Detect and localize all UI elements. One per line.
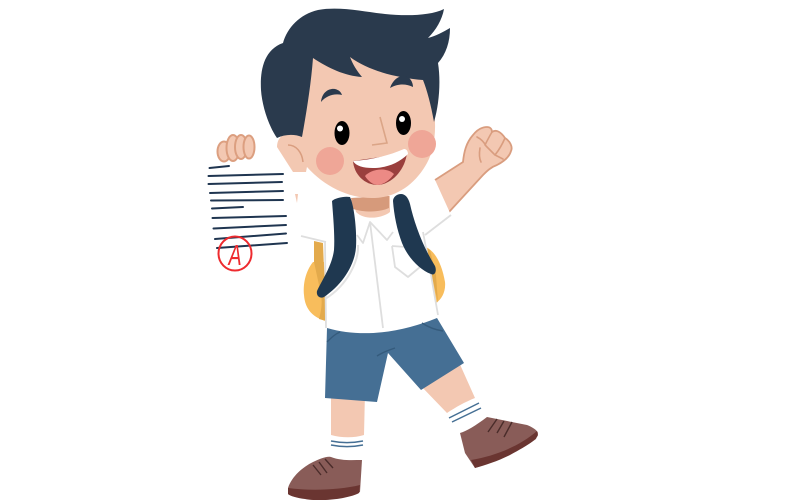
ear fold: [288, 145, 303, 162]
shirt: [296, 180, 451, 330]
hair: [261, 9, 450, 138]
right shoe: [460, 417, 538, 468]
arm sliver behind paper: [295, 194, 298, 203]
right shoe laces: [488, 419, 512, 437]
mouth: [353, 149, 408, 185]
nose: [372, 117, 387, 145]
right eyebrow: [390, 76, 413, 88]
text lines on paper: [208, 166, 287, 248]
fist holding paper: [218, 135, 254, 162]
right eye: [396, 111, 411, 135]
backpack straps: [317, 194, 436, 299]
right sock stripes: [449, 403, 481, 422]
left eyebrow: [321, 89, 342, 102]
left shoe: [288, 457, 362, 500]
neck: [351, 196, 390, 218]
right cheek: [408, 130, 436, 158]
left sock stripes: [331, 441, 363, 446]
head: [261, 9, 450, 198]
left shoe laces: [313, 459, 333, 475]
teeth: [353, 149, 408, 168]
graded paper: [208, 166, 287, 272]
face: [299, 45, 435, 198]
left eye: [334, 121, 350, 145]
left leg: [331, 392, 365, 446]
raised arm and fist: [435, 127, 512, 212]
left cheek: [316, 147, 344, 175]
grade circle: [218, 236, 252, 270]
ear: [277, 133, 312, 172]
shirt seams: [301, 215, 451, 328]
right leg: [420, 360, 481, 422]
grade letter: A: [227, 240, 242, 272]
backpack: [304, 241, 445, 321]
shorts: [325, 318, 464, 402]
shorts creases: [327, 323, 443, 356]
